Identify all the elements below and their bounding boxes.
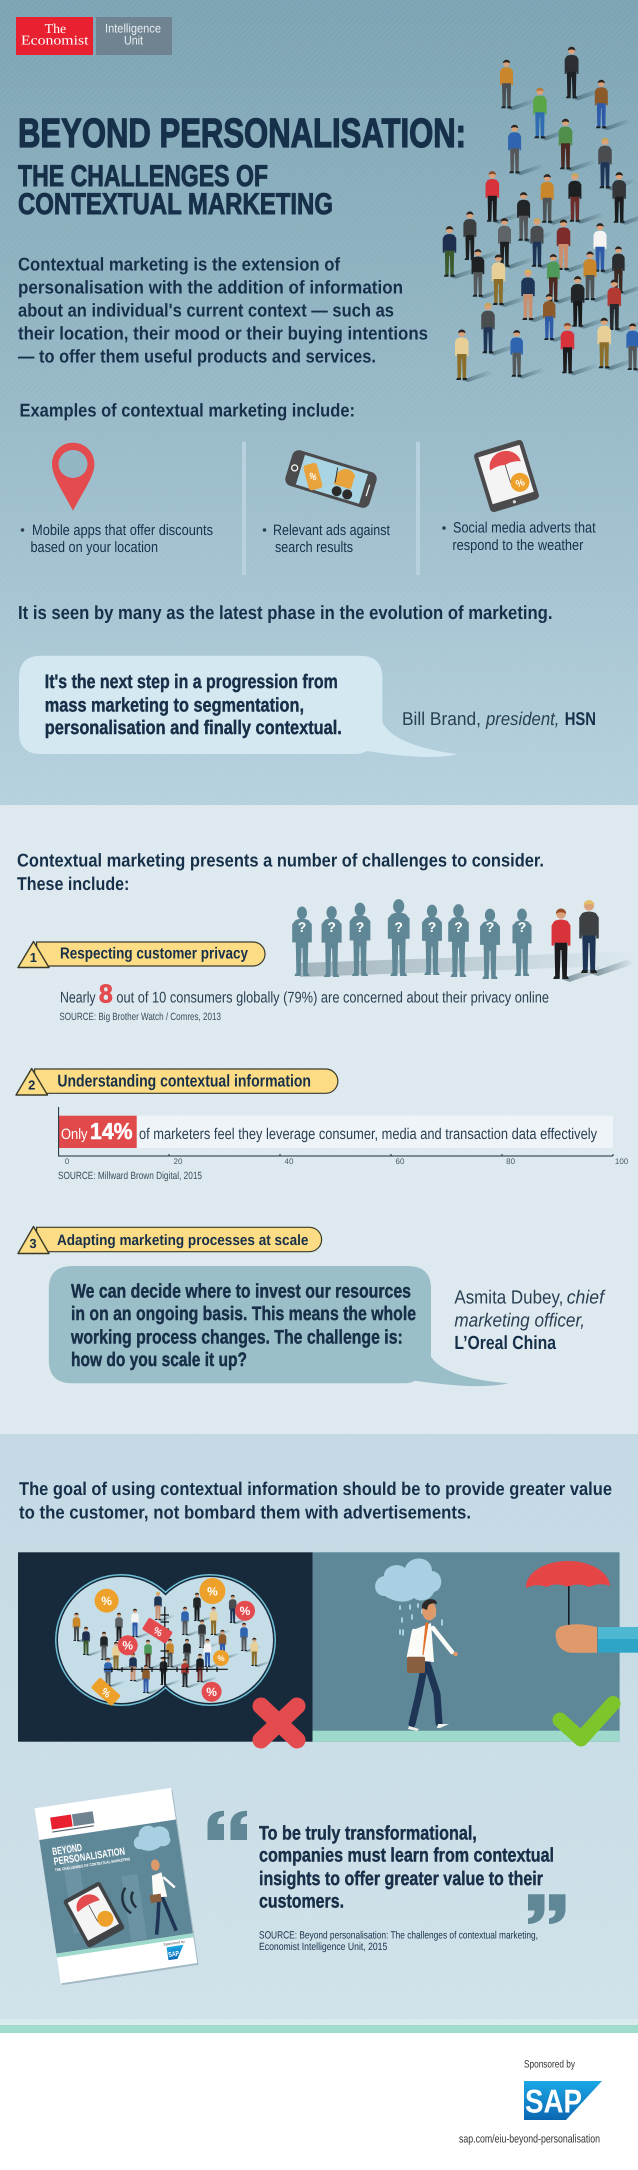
statement: goal of contextual information: to the customer, not bombard them with advertisements. [19, 1501, 471, 1522]
banner 3: adapting marketing processes [18, 1226, 322, 1254]
discount badges: % [206, 1685, 217, 1699]
speech bubble: Bill Brand quote: personalisation and finally contextual. [45, 717, 342, 739]
intro paragraph: Contextual marketing is the extension of [18, 254, 341, 275]
background: footer [0, 2033, 638, 2170]
banner 3: adapting marketing processes: 3 [29, 1236, 37, 1251]
background: pale band [0, 2019, 638, 2025]
discount badges: % [240, 1604, 251, 1618]
quote mark: opening [208, 1811, 247, 1840]
quote mark: closing [528, 1894, 566, 1924]
icon: smartphone with stroller ad: % [308, 471, 318, 483]
speech bubble: Asmita Dubey quote: in on an ongoing basis. This means the whole [71, 1303, 416, 1325]
attribution: Asmita Dubey: marketing officer, [454, 1311, 585, 1332]
text: mobile apps [21, 522, 213, 556]
banner 1: respecting customer privacy: Respecting customer privacy [60, 945, 248, 962]
discount badges: % [99, 1686, 113, 1701]
illustration: silhouettes and two identified consumers: ? [298, 919, 306, 935]
bar chart: 14% of marketers: 100 [615, 1157, 629, 1166]
source: report: SOURCE: Beyond personalisation: The challenges of contextual marketing, [259, 1929, 538, 1941]
discount badges [91, 1578, 255, 1706]
text: social media [442, 520, 596, 554]
text: relevant ads: Relevant ads against [273, 522, 391, 539]
bar chart: 14% of marketers: 0 [65, 1157, 70, 1166]
logo: The Economist Intelligence Unit: Intelligence [105, 21, 161, 35]
speech bubble: Asmita Dubey quote: We can decide where to invest our resources [71, 1280, 411, 1302]
intro paragraph: about an individual's current context — such as [18, 300, 394, 321]
discount badges: % [101, 1594, 112, 1608]
logo: The Economist Intelligence Unit: The [45, 21, 66, 36]
banner 2: understanding contextual information [16, 1068, 338, 1095]
illustration: silhouettes and two identified consumers [292, 899, 638, 982]
intro paragraph: their location, their mood or their buying intentions [18, 322, 428, 344]
logo: The Economist Intelligence Unit [16, 17, 172, 55]
text: relevant ads [263, 522, 391, 556]
bar chart: 14% of marketers: 14% [90, 1118, 133, 1144]
attribution: Asmita Dubey: L’Oreal China [454, 1333, 556, 1354]
illustration: silhouettes and two identified consumers: ? [454, 919, 463, 935]
heading: examples: Examples of contextual marketing include: [20, 400, 355, 421]
banner 1: respecting customer privacy [18, 942, 265, 968]
background: goal section [0, 1434, 638, 2019]
attribution: Asmita Dubey: chief [567, 1287, 606, 1308]
text: mobile apps: Mobile apps that offer discounts [32, 522, 213, 539]
quote text: To be truly transformational, [259, 1822, 477, 1844]
source: Millward Brown: SOURCE: Millward Brown Digital, 2015 [58, 1170, 202, 1182]
pavement [312, 1731, 620, 1742]
hand holding umbrella [526, 1561, 638, 1653]
source: report: Economist Intelligence Unit, 2015 [259, 1941, 387, 1953]
subtitle [18, 160, 333, 221]
heading: challenges: Contextual marketing presents a number of challenges to consider. [17, 850, 544, 871]
icon: green tick [560, 1704, 613, 1739]
statement: goal of contextual information [19, 1478, 612, 1522]
illustration: crowd of people [443, 47, 638, 382]
quote text [259, 1822, 554, 1913]
banner 2: understanding contextual information: 2 [28, 1078, 35, 1092]
illustration: silhouettes and two identified consumers: ? [327, 919, 336, 935]
icon: tablet with umbrella: % [515, 477, 526, 490]
icon: tablet with umbrella [473, 439, 540, 513]
background: intro section [0, 0, 638, 805]
quote text: insights to offer greater value to their [259, 1868, 543, 1890]
intro paragraph: personalisation with the addition of information [18, 276, 403, 298]
text: relevant ads: search results [275, 539, 353, 556]
targeted crowd [73, 1592, 272, 1694]
heading: challenges [17, 850, 544, 894]
stat: nearly 8 out of 10: out of 10 consumers globally (79%) are concerned about their privacy online [116, 990, 549, 1007]
text: social media: respond to the weather [452, 537, 583, 554]
icon: red cross [261, 1706, 297, 1740]
attribution: Bill Brand: president, [485, 708, 559, 729]
illustration: silhouettes and two identified consumers: ? [394, 919, 403, 935]
sponsor label: Sponsored by [524, 2058, 576, 2070]
quote text: customers. [259, 1891, 344, 1913]
binocular lenses [55, 1574, 276, 1706]
attribution: Bill Brand: Bill Brand, [402, 708, 481, 729]
speech bubble: Bill Brand quote: It's the next step in a progression from [45, 671, 338, 693]
source: report [259, 1929, 538, 1953]
bar chart: 14% of marketers [59, 1107, 629, 1166]
attribution: Asmita Dubey: Asmita Dubey, [454, 1287, 563, 1308]
bar chart: 14% of marketers: 60 [396, 1157, 405, 1166]
intro paragraph [18, 254, 428, 367]
icon: location pin [52, 443, 94, 511]
icon: smartphone with stroller ad [284, 448, 378, 510]
bar chart: 14% of marketers: 20 [174, 1157, 183, 1166]
stat: nearly 8 out of 10: 8 [99, 979, 113, 1009]
discount badges: % [151, 1625, 164, 1640]
logo: The Economist Intelligence Unit: Unit [124, 34, 143, 48]
report cover: BEYOND [51, 1842, 83, 1858]
attribution: Bill Brand [402, 708, 596, 729]
banner 3: adapting marketing processes: Adapting marketing processes at scale [57, 1232, 308, 1249]
subtitle: THE CHALLENGES OF [18, 160, 268, 193]
attribution: Bill Brand: HSN [565, 708, 596, 729]
attribution: Asmita Dubey [454, 1287, 606, 1354]
quote text: companies must learn from contextual [259, 1845, 554, 1867]
subtitle: CONTEXTUAL MARKETING [18, 188, 333, 221]
bar chart: 14% of marketers: Only [61, 1126, 88, 1143]
speech bubble: Asmita Dubey quote: how do you scale it up? [71, 1349, 247, 1371]
report cover: SAP [168, 1951, 180, 1959]
report cover: PERSONALISATION [53, 1845, 126, 1868]
text: mobile apps: based on your location [30, 539, 158, 556]
speech bubble: Bill Brand quote [19, 656, 458, 757]
speech bubble: Asmita Dubey quote [49, 1266, 509, 1386]
walking man [407, 1599, 458, 1731]
discount badges: % [217, 1654, 225, 1663]
rain cloud [375, 1559, 442, 1635]
heading: challenges: These include: [17, 873, 129, 894]
bar chart: 14% of marketers: 40 [285, 1157, 294, 1166]
bar chart: 14% of marketers: 80 [506, 1157, 516, 1166]
text: social media: Social media adverts that [453, 520, 596, 537]
speech bubble: Bill Brand quote: mass marketing to segmentation, [45, 695, 304, 717]
illustration: silhouettes and two identified consumers: ? [518, 919, 526, 935]
logo: The Economist Intelligence Unit: Economist [21, 32, 89, 48]
illustration: silhouettes and two identified consumers: ? [356, 919, 364, 935]
report cover: Sponsored by [163, 1940, 185, 1947]
stat: nearly 8 out of 10 [60, 979, 549, 1009]
banner 1: respecting customer privacy: 1 [30, 950, 37, 965]
discount badges: % [122, 1638, 133, 1652]
speech bubble: Asmita Dubey quote: working process changes. The challenge is: [70, 1326, 403, 1348]
logo: SAP: SAP [525, 2083, 582, 2120]
title: BEYOND PERSONALISATION: [18, 110, 466, 156]
stat: nearly 8 out of 10: Nearly [60, 990, 96, 1007]
crosshair [104, 1607, 228, 1672]
panel: wrong approach, binoculars on crowd [18, 1552, 312, 1742]
panel: right approach, umbrella offered in the rain [312, 1552, 638, 1742]
background: challenges section [0, 805, 638, 1434]
banner 2: understanding contextual information: Understanding contextual information [57, 1072, 311, 1091]
report cover: THE CHALLENGES OF CONTEXTUAL MARKETING [55, 1856, 130, 1872]
intro paragraph: — to offer them useful products and services. [18, 346, 376, 367]
background: mint band [0, 2025, 638, 2033]
report cover [35, 1788, 199, 1985]
discount badges: % [207, 1584, 218, 1598]
illustration: silhouettes and two identified consumers: ? [428, 919, 436, 935]
source: Big Brother Watch: SOURCE: Big Brother Watch / Comres, 2013 [59, 1011, 221, 1023]
illustration: silhouettes and two identified consumers: ? [486, 919, 494, 935]
statement: latest phase: It is seen by many as the latest phase in the evolution of marketing. [18, 603, 552, 624]
